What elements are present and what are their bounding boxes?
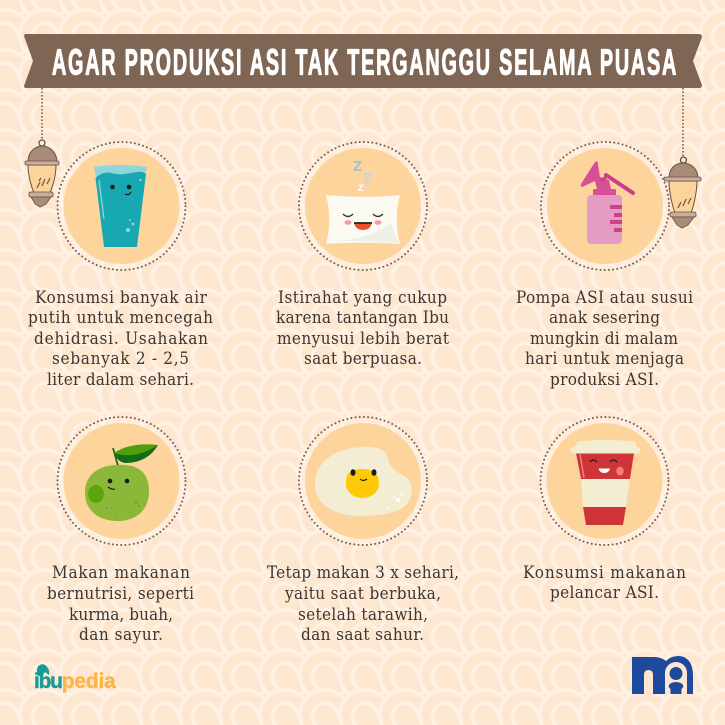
icon: paper cup <box>571 440 640 525</box>
icon: sleeping pillow: Z <box>353 158 362 175</box>
panel: rest <box>276 142 454 369</box>
text: pump: produksi ASI. <box>550 370 659 390</box>
text: water: putih untuk mencegah <box>28 308 213 328</box>
icon: fried egg <box>315 447 412 516</box>
text: rest: saat berpuasa. <box>304 349 422 369</box>
panel: pump <box>516 142 698 390</box>
text: rest: menyusui lebih berat <box>277 329 450 349</box>
text: pump: mungkin di malam <box>530 329 678 349</box>
text: drink: Konsumsi makanan <box>523 563 686 583</box>
panel: water <box>28 142 218 390</box>
icon: green apple <box>85 444 158 521</box>
panel: fruit <box>47 417 199 645</box>
panel: egg <box>267 417 464 645</box>
panel: drink <box>523 417 692 603</box>
text: water: dehidrasi. Usahakan <box>34 329 208 349</box>
title: AGAR PRODUKSI ASI TAK TERGANGGU SELAMA PUASA <box>52 44 676 83</box>
text: water: sebanyak 2 - 2,5 <box>52 349 189 369</box>
text: rest: karena tantangan Ibu <box>276 308 449 328</box>
logo: mothercare <box>632 656 693 694</box>
text: fruit: kurma, buah, <box>69 605 173 625</box>
icon: sleeping pillow: Z <box>363 170 372 186</box>
left lantern <box>25 88 59 207</box>
text: egg: yaitu saat berbuka, <box>284 584 441 604</box>
text: fruit: Makan makanan <box>52 563 190 583</box>
text: fruit: bernutrisi, seperti <box>47 584 194 604</box>
text: egg: Tetap makan 3 x sehari, <box>267 563 459 583</box>
logo: ibupedia: ibupedia <box>34 670 116 693</box>
text: drink: pelancar ASI. <box>550 583 659 603</box>
icon: sleeping pillow: Z <box>358 183 364 193</box>
right lantern <box>664 88 701 228</box>
text: rest: Istirahat yang cukup <box>278 288 447 308</box>
text: egg: dan saat sahur. <box>301 625 424 645</box>
text: pump: Pompa ASI atau susui <box>516 288 693 308</box>
text: pump: anak sesering <box>549 308 660 328</box>
icon: sleeping pillow <box>327 158 399 243</box>
text: pump: hari untuk menjaga <box>525 349 684 369</box>
title banner <box>24 34 702 88</box>
icon: breast pump <box>581 161 633 244</box>
icon: glass of water <box>94 165 147 247</box>
text: fruit: dan sayur. <box>79 625 163 645</box>
text: water: Konsumsi banyak air <box>35 288 208 308</box>
text: egg: setelah tarawih, <box>298 605 428 625</box>
text: water: liter dalam sehari. <box>47 370 194 390</box>
